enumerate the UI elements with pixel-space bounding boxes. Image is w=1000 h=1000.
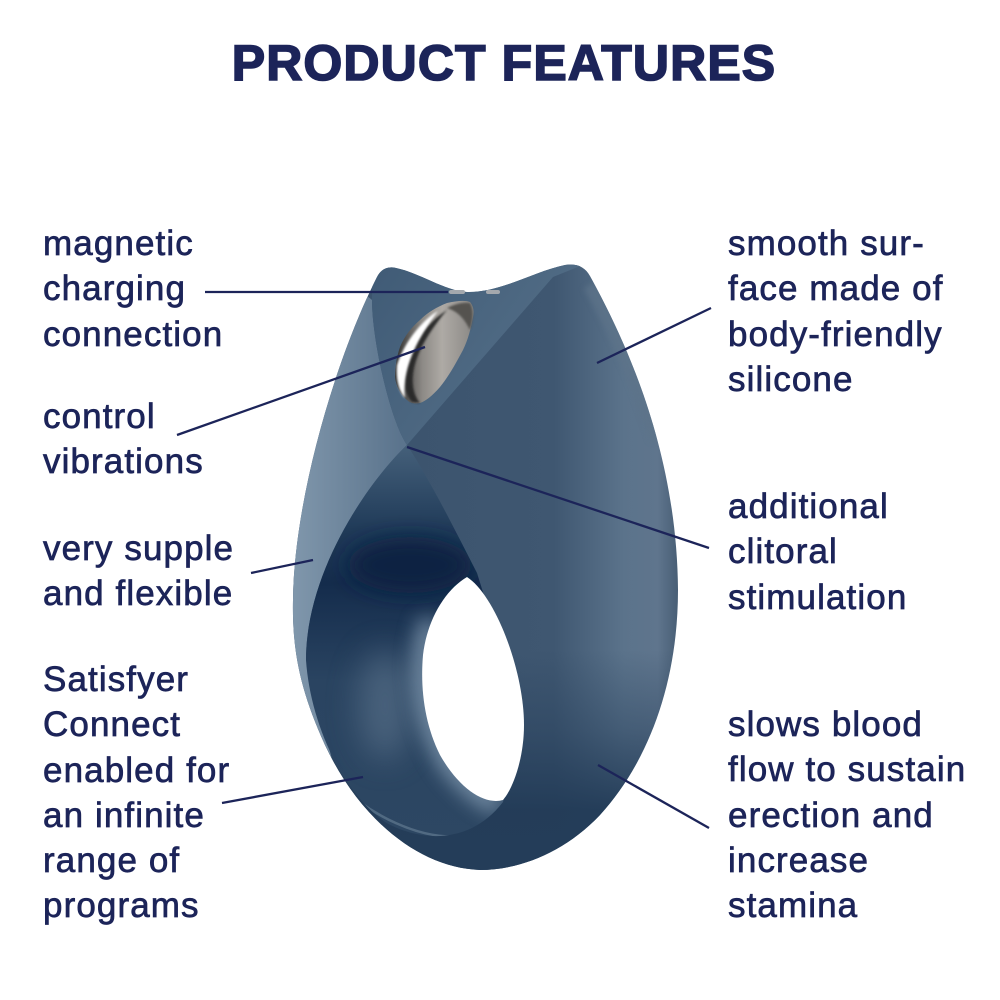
top facet — [372, 264, 580, 444]
magnetic charging contacts — [449, 290, 500, 294]
lower swoop — [306, 446, 504, 836]
leader lines — [177, 292, 711, 828]
product illustration: ring with pointed top — [176, 264, 712, 870]
label: smooth surface: smooth sur- face made of body-friendly silicone — [728, 224, 944, 399]
label: magnetic charging connection: magnetic charging connection — [43, 224, 223, 354]
right body — [280, 250, 690, 880]
label: very supple and flexible: very supple and flexible — [43, 529, 234, 613]
control button — [395, 301, 474, 403]
label: slows blood flow: slows blood flow to sustain erection and increase stamina — [728, 705, 966, 925]
title: PRODUCT FEATURES — [232, 35, 776, 91]
left light facet — [292, 296, 407, 759]
right rim highlight — [590, 285, 657, 440]
label: control vibrations: control vibrations — [43, 397, 204, 481]
ring opening — [422, 577, 524, 801]
label: Satisfyer Connect: Satisfyer Connect enabled for an infinite range of programs — [43, 660, 230, 925]
label: additional clitoral stimulation: additional clitoral stimulation — [728, 487, 907, 617]
